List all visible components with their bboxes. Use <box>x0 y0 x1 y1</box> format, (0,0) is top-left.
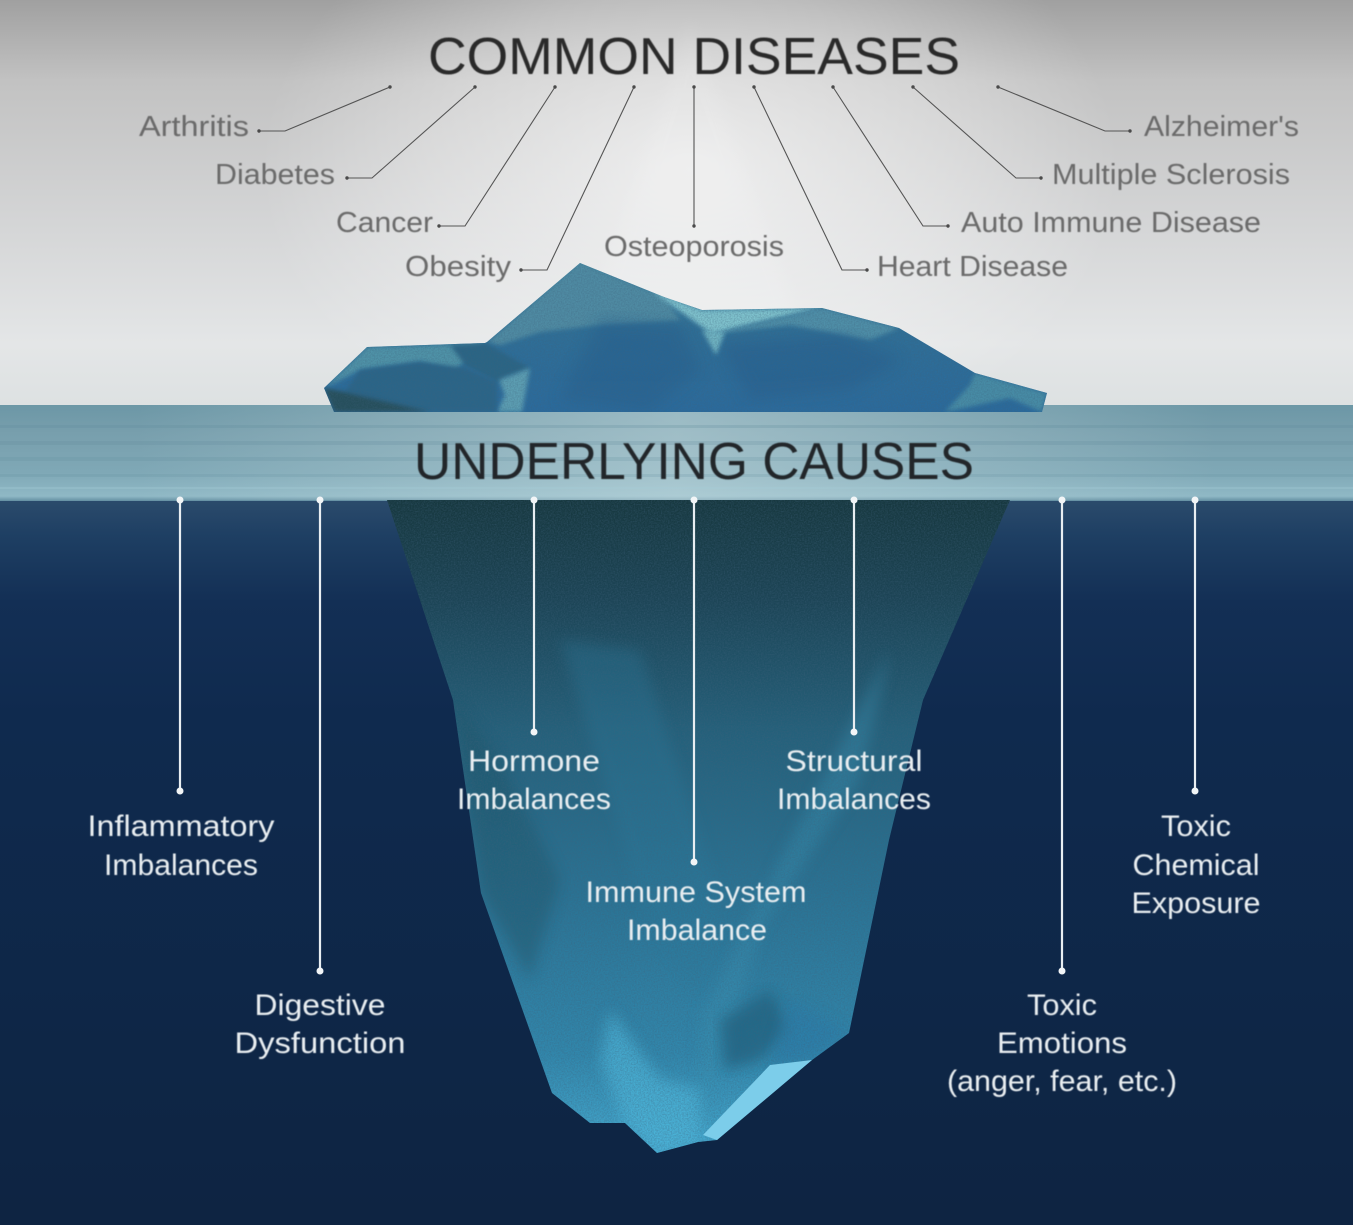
background: sky <box>0 0 1353 405</box>
label: structural imbalances: Imbalances <box>777 783 931 816</box>
cause labels <box>88 745 1260 1098</box>
label: hormone imbalances: Imbalances <box>457 783 611 816</box>
disease labels: Osteoporosis <box>604 231 784 263</box>
label: immune system imbalance: Imbalance <box>627 914 767 947</box>
label: toxic emotions: Toxic <box>1027 989 1097 1022</box>
label: toxic emotions: (anger, fear, etc.) <box>947 1065 1177 1098</box>
label: structural imbalances: Structural <box>786 745 922 778</box>
label: inflammatory imbalances: Inflammatory <box>88 810 274 843</box>
label: digestive dysfunction: Digestive <box>254 989 386 1022</box>
water band <box>0 405 1353 501</box>
label: structural imbalances <box>777 745 931 816</box>
label: toxic chemical exposure: Chemical <box>1132 849 1260 882</box>
label: toxic chemical exposure: Toxic <box>1161 810 1231 843</box>
background: deep ocean <box>0 500 1353 1225</box>
disease labels: Cancer <box>336 207 433 239</box>
label: immune system imbalance: Immune System <box>586 876 806 909</box>
label: inflammatory imbalances: Imbalances <box>104 849 258 882</box>
label: inflammatory imbalances <box>88 810 274 882</box>
connector lines: underlying causes <box>176 496 1198 974</box>
disease labels <box>139 111 1299 283</box>
disease labels: Auto Immune Disease <box>961 207 1261 239</box>
disease labels: Obesity <box>405 251 512 283</box>
disease labels: Diabetes <box>215 159 335 191</box>
disease labels: Heart Disease <box>877 251 1068 283</box>
iceberg: below water <box>380 500 1020 1160</box>
connector lines: common diseases <box>257 85 1132 272</box>
label: toxic emotions <box>947 989 1177 1098</box>
title: common diseases: COMMON DISEASES <box>428 28 960 86</box>
disease labels: Multiple Sclerosis <box>1052 159 1290 191</box>
label: immune system imbalance <box>586 876 806 947</box>
label: hormone imbalances: Hormone <box>468 745 600 778</box>
label: digestive dysfunction: Dysfunction <box>234 1027 406 1060</box>
heading: underlying causes: UNDERLYING CAUSES <box>414 433 974 491</box>
disease labels: Alzheimer's <box>1144 111 1299 143</box>
label: toxic chemical exposure <box>1132 810 1260 920</box>
disease labels: Arthritis <box>139 111 249 143</box>
label: hormone imbalances <box>457 745 611 816</box>
label: digestive dysfunction <box>234 989 406 1060</box>
label: toxic emotions: Emotions <box>997 1027 1127 1060</box>
label: toxic chemical exposure: Exposure <box>1132 887 1260 920</box>
bright facet <box>703 1060 812 1140</box>
iceberg: above water <box>320 260 1050 415</box>
